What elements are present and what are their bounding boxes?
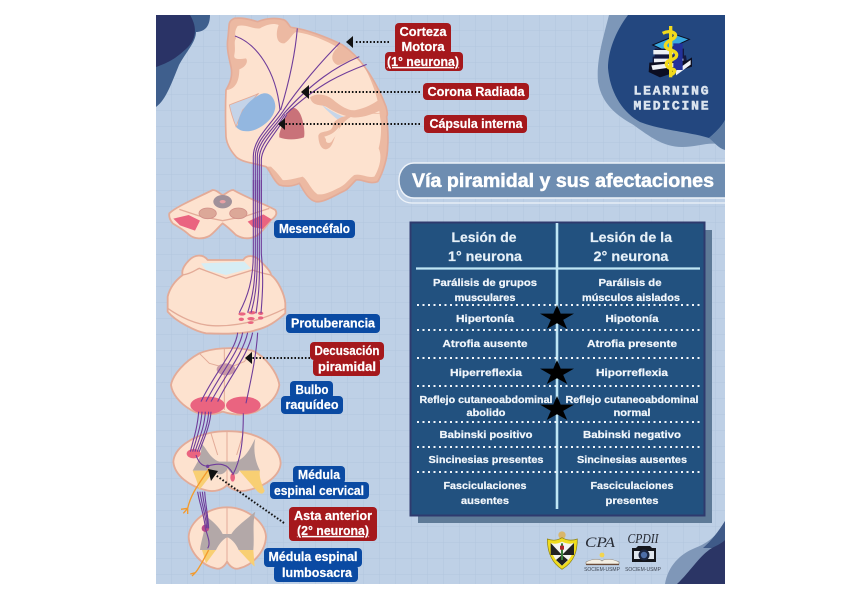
- label: Medula espinal lumbosacra: Médula espinal: [268, 550, 358, 564]
- descending fibers: corona radiata: [235, 28, 367, 223]
- lower operculum band: [318, 113, 387, 149]
- title banner: [397, 163, 740, 203]
- cerebrum outline: [225, 18, 388, 202]
- logo wordmark: [634, 86, 708, 110]
- column: second neuron lesion: normal: [614, 407, 651, 419]
- logo: CPDII camera: SOCIEM-USMP: [625, 567, 662, 573]
- icon: university shield: [547, 531, 577, 569]
- upper operculum band: [310, 94, 386, 117]
- logo: CPA: SOCIEM-USMP: [584, 567, 621, 573]
- label: Medula espinal cervical: espinal cervical: [274, 484, 364, 498]
- column: second neuron lesion: Hiporreflexia: [596, 367, 668, 379]
- label: Medula espinal lumbosacra: [264, 548, 362, 582]
- logo wordmark: LEARNING: [634, 84, 709, 98]
- label: Bulbo raquideo: [281, 381, 343, 414]
- column: first neuron lesion: ausentes: [461, 495, 509, 507]
- column: first neuron lesion: musculares: [454, 292, 516, 304]
- label: Corteza Motora: (1° neurona): [387, 55, 459, 69]
- diagram: lumbosacral spinal cord: [189, 492, 266, 576]
- fibers: descending to lumbar: [198, 492, 209, 548]
- column: first neuron lesion: Hiperreflexia: [450, 367, 522, 379]
- column: first neuron lesion: Hipertonía: [456, 313, 514, 325]
- label: Corona Radiada: Corona Radiada: [428, 85, 526, 99]
- label: Decusacion piramidal: Decusación: [314, 344, 380, 358]
- label: Corteza Motora: [385, 23, 463, 71]
- label: Capsula interna: Cápsula interna: [430, 117, 524, 131]
- column: second neuron lesion: [566, 277, 699, 507]
- logo: CPDII camera: [625, 532, 662, 573]
- descending fibers: through pons: [239, 180, 263, 313]
- icon: star 1: [540, 305, 574, 329]
- label: Decusacion piramidal: piramidal: [318, 360, 376, 374]
- label: Protuberancia: Protuberancia: [291, 316, 376, 330]
- column: second neuron lesion: Hipotonía: [606, 313, 659, 325]
- column: second neuron lesion: Fasciculaciones: [590, 480, 674, 492]
- fibers: decussation: [201, 333, 258, 403]
- label: Bulbo raquideo: Bulbo: [296, 383, 329, 397]
- icon: books with serpent staff: [649, 26, 692, 77]
- label: Corteza Motora: Corteza: [400, 25, 448, 39]
- panel: comparison table: [410, 222, 712, 523]
- decorative blob: top left: [156, 15, 210, 107]
- logo: CPDII camera: CPDII: [628, 532, 660, 547]
- arrow: decusacion piramidal: [245, 352, 310, 364]
- lateral sulcus slit: [322, 105, 349, 123]
- background: [156, 15, 725, 584]
- diagram: mesencephalon: [169, 190, 276, 238]
- arrow: capsula interna: [278, 118, 420, 130]
- column: first neuron lesion: Reflejo cutaneoabdominal: [420, 394, 553, 406]
- column: second neuron lesion: Atrofia presente: [587, 338, 677, 350]
- column: first neuron lesion: Sincinesias presentes: [428, 454, 544, 466]
- column: first neuron lesion: Parálisis de grupos: [433, 277, 537, 289]
- logo: CPA: [584, 535, 621, 573]
- diagram: cerebrum coronal section: [225, 18, 388, 223]
- column: second neuron lesion: Parálisis de: [598, 277, 662, 289]
- fibers: lateral and anterior corticospinal tracts: [190, 412, 243, 475]
- column: second neuron lesion: Sincinesias ausentes: [577, 454, 687, 466]
- label: Asta anterior: [289, 507, 377, 541]
- label: Medula espinal lumbosacra: lumbosacra: [282, 566, 353, 580]
- diagram: medulla oblongata: [171, 333, 279, 415]
- column headers: [448, 229, 672, 264]
- logo wordmark: MEDICINE: [634, 98, 709, 114]
- label: Asta anterior: Asta anterior: [294, 509, 372, 523]
- column: second neuron lesion: Babinski negativo: [583, 429, 681, 441]
- arrow: corona radiada: [301, 85, 420, 99]
- title text: Vía piramidal y sus afectaciones: [412, 170, 714, 192]
- column: first neuron lesion: Atrofia ausente: [442, 338, 528, 350]
- arrow: asta anterior: [208, 469, 284, 523]
- column: first neuron lesion: [420, 277, 553, 507]
- label: Medula espinal cervical: [270, 466, 369, 499]
- table shadow: [418, 230, 712, 523]
- label: Bulbo raquideo: raquídeo: [286, 398, 339, 412]
- decorative blob: bottom right: [665, 521, 725, 584]
- label: Medula espinal cervical: Médula: [298, 468, 341, 482]
- table body: [410, 222, 704, 516]
- label: Protuberancia: [286, 314, 380, 333]
- logo: Learning Medicine: [598, 15, 725, 150]
- column: first neuron lesion: Fasciculaciones: [444, 480, 527, 492]
- label: Mesencefalo: Mesencéfalo: [279, 222, 350, 236]
- diagram: pons: [168, 180, 285, 334]
- column headers: 1° neurona: [448, 248, 522, 264]
- column: second neuron lesion: músculos aislados: [582, 292, 680, 304]
- arrow: corteza motora: [346, 36, 389, 48]
- diagram: cervical spinal cord: [173, 412, 281, 514]
- column headers: Lesión de: [452, 229, 517, 245]
- column headers: Lesión de la: [590, 229, 672, 245]
- label: Asta anterior: (2° neurona): [297, 524, 369, 538]
- label: Decusacion piramidal: [310, 342, 384, 376]
- column: first neuron lesion: Babinski positivo: [440, 429, 532, 441]
- icon: star 2: [540, 360, 574, 384]
- icon: star 3: [540, 396, 574, 420]
- column: second neuron lesion: Reflejo cutaneoabdominal: [566, 394, 699, 406]
- label: Corteza Motora: Motora: [402, 40, 446, 54]
- column: second neuron lesion: presentes: [606, 495, 659, 507]
- column headers: 2° neurona: [594, 248, 669, 264]
- column: first neuron lesion: abolido: [466, 407, 506, 419]
- logo: CPA: CPA: [585, 535, 616, 551]
